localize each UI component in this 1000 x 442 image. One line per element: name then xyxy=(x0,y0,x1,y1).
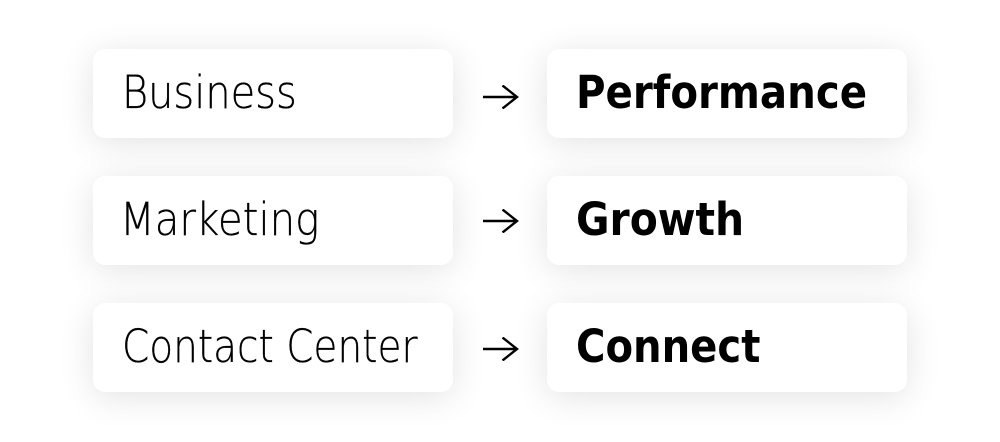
panel: Marketing: Marketing xyxy=(120,193,319,246)
panel: Business xyxy=(93,49,453,138)
arrow: Contact Center to Connect xyxy=(483,337,519,361)
panel: Contact Center xyxy=(93,303,453,392)
panel: Connect xyxy=(547,303,907,392)
panel: Business: Business xyxy=(122,66,297,119)
arrow: Marketing to Growth xyxy=(483,209,519,233)
panel: Growth: Growth xyxy=(576,193,744,246)
panel: Connect: Connect xyxy=(576,320,760,373)
panel: Performance xyxy=(547,49,907,138)
panel: Performance: Performance xyxy=(576,66,867,119)
arrow: Business to Performance xyxy=(483,85,519,109)
panel: Marketing xyxy=(93,176,453,265)
panel: Growth xyxy=(547,176,907,265)
panel: Contact Center: Contact Center xyxy=(122,320,418,373)
